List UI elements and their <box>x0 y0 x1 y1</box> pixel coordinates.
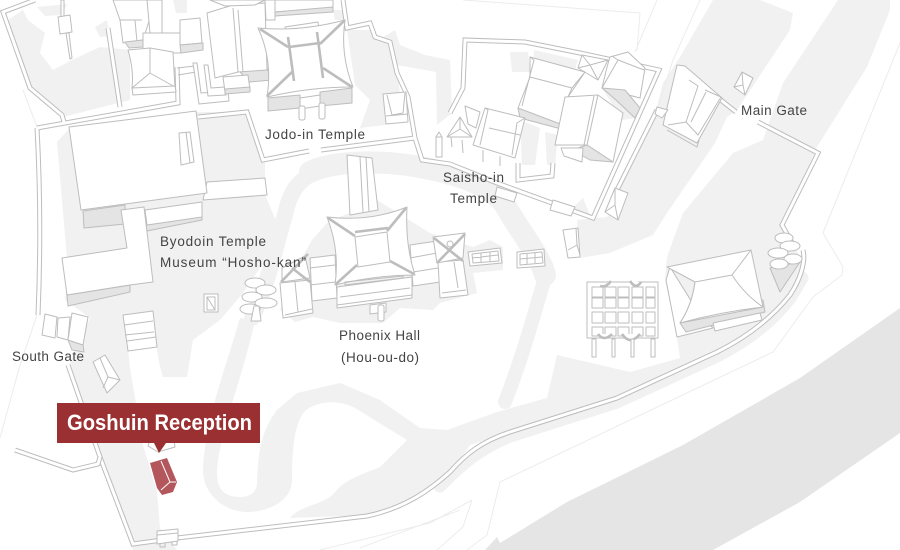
building: east of museum <box>123 311 157 351</box>
building: large hall east <box>666 250 765 337</box>
label: Phoenix Hall <box>339 328 420 365</box>
label: Saisho-in Temple <box>443 170 504 206</box>
building: south lodge <box>93 355 120 393</box>
label: Main Gate: Main Gate <box>741 103 807 118</box>
tree: west of Phoenix Hall <box>240 278 277 321</box>
building: small hall behind reception <box>148 440 175 452</box>
building: Saisho-in west shrine <box>436 132 442 157</box>
label: Byodoin Temple Museum Hosho-kan: Byodoin Temple <box>160 234 266 249</box>
garden: east band by Saisho-in <box>577 0 793 258</box>
building: gate near Jodo-in <box>383 92 408 124</box>
gate: south boundary gate <box>157 529 178 547</box>
garden: Saisho-in yard <box>510 50 640 215</box>
callout: Goshuin Reception: Goshuin Reception <box>67 410 252 435</box>
icon: lantern post <box>58 0 72 59</box>
garden: museum and south gate <box>57 112 277 550</box>
label: Byodoin Temple Museum Hosho-kan <box>160 234 306 270</box>
building: Jodo-in Temple <box>258 20 353 120</box>
label: Phoenix Hall: (Hou-ou-do) <box>341 350 419 365</box>
label: Byodoin Temple Museum Hosho-kan: Museum “Hosho-kan” <box>160 255 306 270</box>
building: small hall south of Saisho-in <box>563 228 580 258</box>
building: Byodoin Temple Museum <box>62 111 267 306</box>
garden: Phoenix island <box>280 200 503 323</box>
label: Saisho-in Temple: Temple <box>450 191 497 206</box>
garden: Jodo-in surroundings <box>37 0 347 37</box>
small square shrine <box>204 294 218 312</box>
tree: east pine <box>768 233 802 292</box>
fence panels near Phoenix Hall <box>468 248 545 268</box>
garden: grey strip below road <box>440 278 802 486</box>
building: Saisho-in Temple complex <box>447 52 645 220</box>
icon: Goshuin Reception building (red) <box>150 458 177 495</box>
garden: ribbon north of Phoenix Hall <box>252 170 320 318</box>
callout: Goshuin Reception <box>57 403 260 453</box>
building: Phoenix Hall right wing tower <box>433 233 468 298</box>
building: South Gate <box>42 313 88 352</box>
building: Phoenix Hall <box>310 155 440 321</box>
river <box>485 308 900 550</box>
label: Phoenix Hall: Phoenix Hall <box>339 328 420 343</box>
label: Saisho-in Temple: Saisho-in <box>443 170 504 185</box>
garden: band by main gate <box>665 0 890 358</box>
buildings: north precinct <box>113 0 333 104</box>
garden grid panel <box>587 281 658 357</box>
label: Jodo-in Temple: Jodo-in Temple <box>265 127 365 142</box>
garden: Phoenix pond ribbon <box>203 318 717 518</box>
building: Main Gate hall <box>655 65 722 147</box>
garden: northwest lawn <box>8 10 130 117</box>
building: Phoenix Hall left wing tower <box>280 254 313 318</box>
building: small gatehouse near Main Gate <box>734 72 753 95</box>
label: South Gate: South Gate <box>12 349 84 364</box>
